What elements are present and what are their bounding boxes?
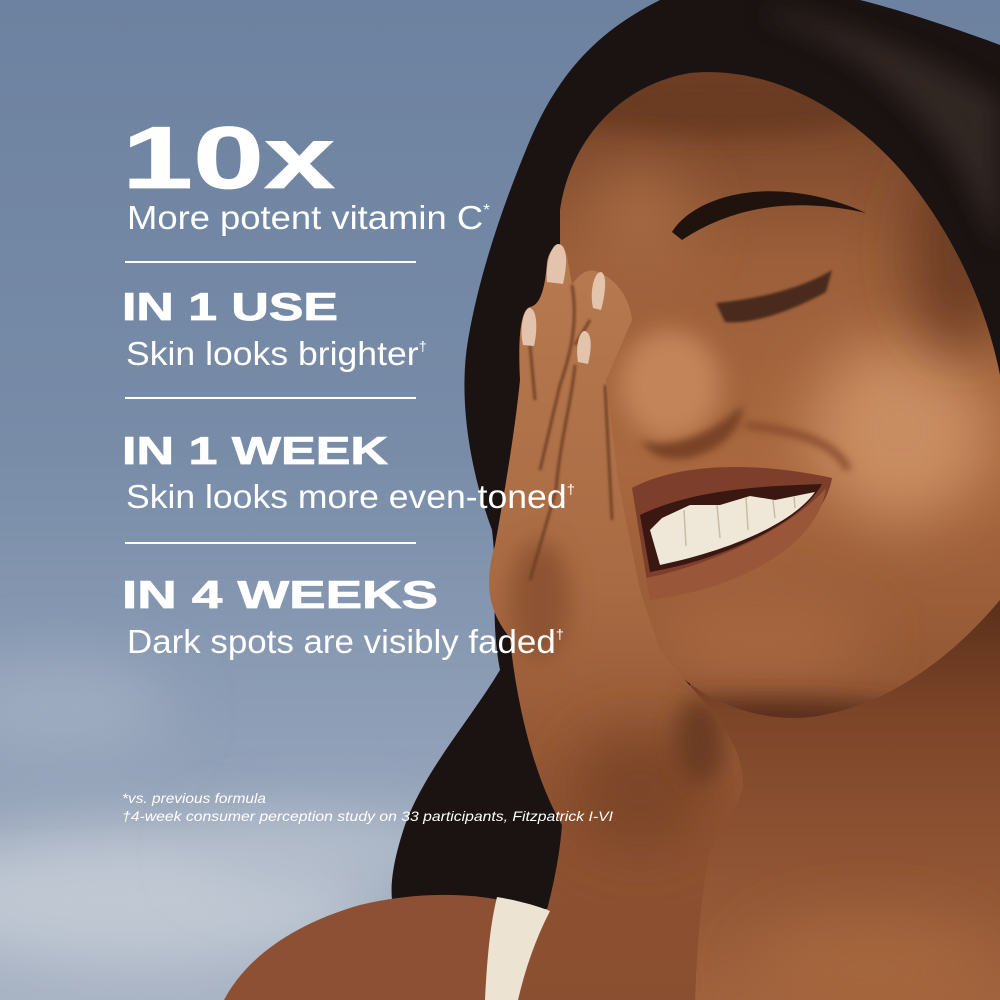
text: more potent vitamin C: More potent vitamin C bbox=[127, 199, 450, 236]
text: skin looks more even-toned: Skin looks more even-toned bbox=[126, 478, 535, 515]
heading: in 4 weeks: IN 4 WEEKS bbox=[122, 574, 438, 617]
heading: in 1 use: IN 1 USE bbox=[122, 286, 338, 329]
text: skin looks more even-toned: † bbox=[567, 481, 575, 497]
text: more potent vitamin C: * bbox=[483, 202, 490, 219]
photo: eyebrow bbox=[672, 191, 866, 240]
footnotes bbox=[122, 790, 613, 824]
photo: strap bbox=[485, 897, 550, 1000]
photo: closed eye bbox=[716, 270, 832, 322]
photo: neck and chest bbox=[600, 560, 1000, 1000]
photo: hand bbox=[489, 250, 743, 1000]
text: skin looks brighter: Skin looks brighter bbox=[126, 335, 397, 372]
heading: 10x: 10x bbox=[122, 108, 335, 207]
footnotes: *vs. previous formula bbox=[122, 790, 266, 806]
photo: hair bbox=[392, 0, 1000, 915]
text: dark spots are visibly faded: Dark spots are visibly faded bbox=[127, 623, 532, 660]
footnotes: †4-week consumer perception study on 33 participants, Fitzpatrick I-VI bbox=[122, 808, 613, 824]
photo: face bbox=[540, 60, 1000, 742]
photo: mouth bbox=[632, 467, 832, 600]
text: skin looks brighter: † bbox=[419, 338, 427, 354]
finger gaps bbox=[530, 285, 612, 580]
nose shadow bbox=[640, 405, 742, 459]
smile crease bbox=[745, 425, 848, 470]
text: dark spots are visibly faded: † bbox=[556, 626, 564, 642]
photo: fingernails bbox=[522, 244, 605, 364]
heading: in 1 week: IN 1 WEEK bbox=[122, 430, 388, 473]
tooth gaps bbox=[684, 496, 795, 546]
photo: shoulder bbox=[224, 895, 570, 1000]
